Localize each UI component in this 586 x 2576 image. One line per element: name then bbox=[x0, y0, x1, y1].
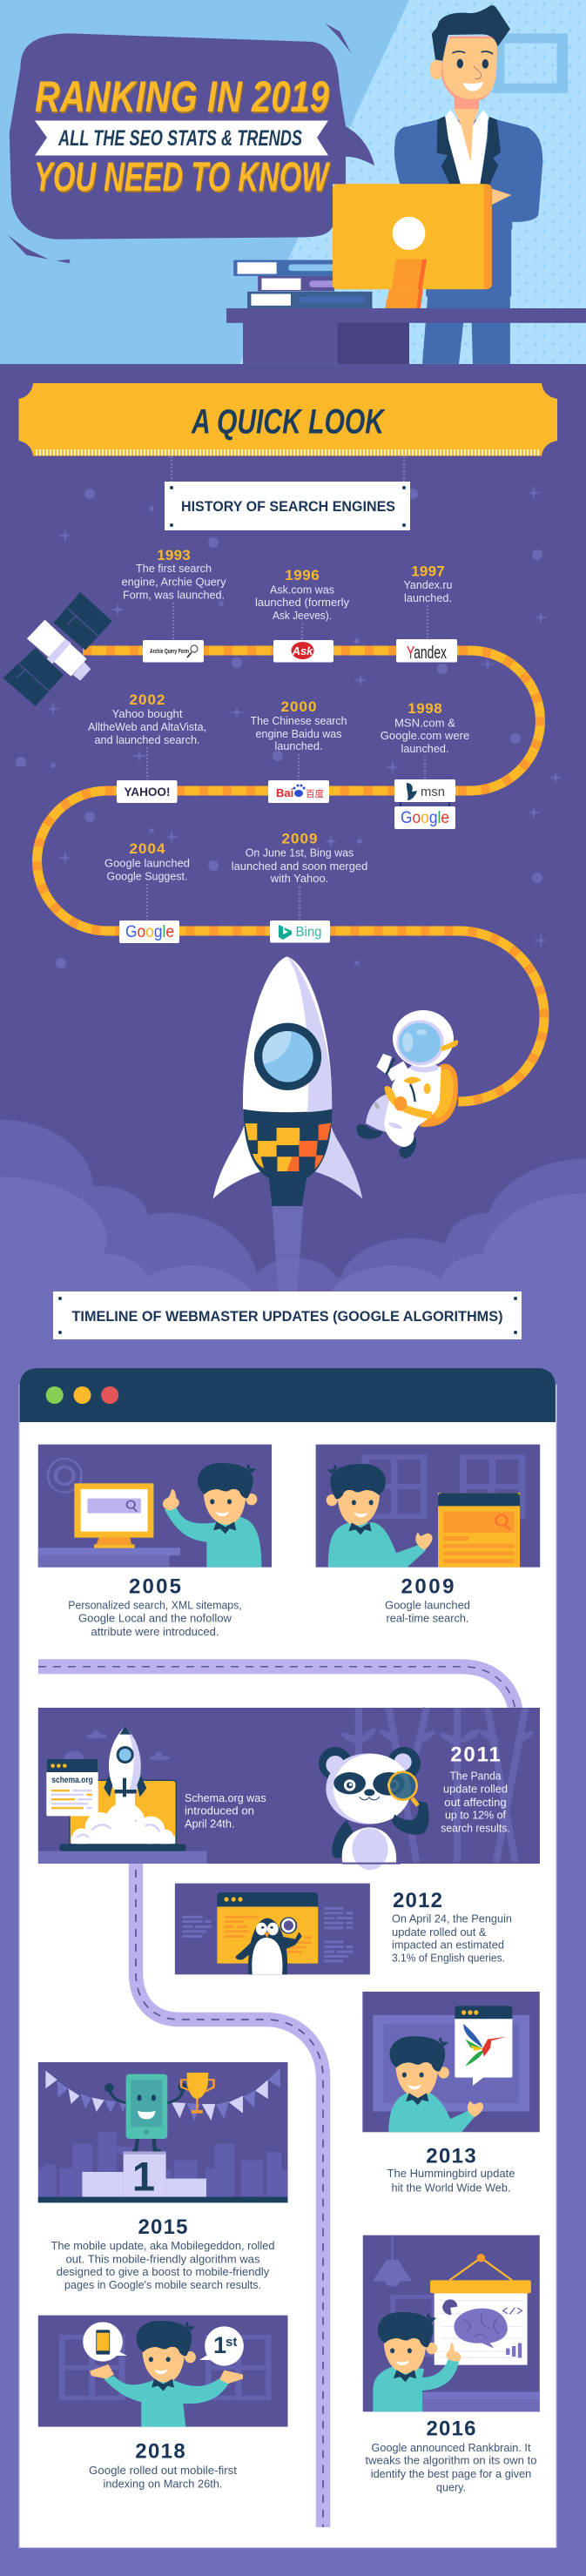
logo: Baidu: 百度 bbox=[306, 788, 324, 799]
trophy bbox=[187, 2073, 208, 2114]
panel: 2009 bbox=[316, 1445, 540, 1568]
icon: satellite bbox=[3, 592, 112, 706]
banner: A Quick Look bbox=[19, 383, 557, 456]
wall with dotted pattern bbox=[239, 0, 586, 364]
background: sky bbox=[0, 0, 586, 364]
text: 2018 bbox=[89, 2440, 237, 2491]
text: 1993: Form, was launched. bbox=[123, 589, 225, 601]
scene: bamboo and panda bbox=[319, 1708, 535, 1870]
text: 1997: 1997 bbox=[411, 563, 445, 580]
text: 1996: Ask Jeeves). bbox=[273, 609, 332, 622]
ribbon subtitle bbox=[35, 120, 328, 155]
text: 2018: 2018 bbox=[135, 2440, 185, 2463]
text: 2002: AlltheWeb and AltaVista, bbox=[88, 720, 206, 733]
text: 2002 bbox=[88, 691, 206, 746]
title: YOU NEED TO KNOW bbox=[34, 153, 331, 199]
title bbox=[34, 72, 331, 199]
sign: history of search engines bbox=[165, 456, 410, 530]
man lower body bbox=[422, 217, 511, 364]
text: 1998: Google.com were bbox=[381, 729, 469, 742]
logo: Baidu: Bai bbox=[276, 786, 293, 799]
logo: Archie Query Form bbox=[143, 640, 204, 662]
text: 2002: and launched search. bbox=[94, 733, 200, 746]
logo: Google bbox=[394, 802, 455, 829]
text: 2016: Google announced Rankbrain. It bbox=[371, 2441, 531, 2454]
text: 2011: up to 12% of bbox=[445, 1808, 506, 1822]
text: 1997: Yandex.ru bbox=[404, 578, 453, 591]
text: 1997 bbox=[404, 563, 453, 604]
text: 2015: pages in Google's mobile search results. bbox=[64, 2278, 261, 2291]
text: 2011: search results. bbox=[441, 1822, 510, 1834]
window buttons bbox=[46, 1386, 118, 1404]
text: 2012: On April 24, the Penguin bbox=[392, 1912, 512, 1925]
text: 2009: real-time search. bbox=[387, 1611, 468, 1625]
text: 1996: 1996 bbox=[285, 567, 320, 583]
picture frame bbox=[499, 38, 562, 88]
text: 1993 bbox=[122, 547, 226, 601]
label: 1st: st bbox=[226, 2335, 237, 2350]
sign: history of search engines: HISTORY OF SEARCH ENGINES bbox=[181, 498, 395, 515]
text: 2016: tweaks the algorithm on its own to bbox=[366, 2454, 536, 2466]
logo: Yandex: Yandex bbox=[407, 644, 447, 663]
logo: Yandex bbox=[396, 639, 457, 663]
panel: 2016 rankbrain bbox=[363, 2235, 540, 2411]
banner: A Quick Look: A QUICK LOOK bbox=[191, 402, 386, 441]
desk bbox=[226, 308, 586, 364]
man upper body and face bbox=[394, 5, 542, 229]
logo: Ask bbox=[273, 640, 333, 662]
text: 2018: indexing on March 26th. bbox=[103, 2477, 223, 2491]
title speech bubble bbox=[8, 24, 374, 263]
text: schema introduced: Schema.org was bbox=[185, 1791, 266, 1804]
text: 2005: Personalized search, XML sitemaps, bbox=[68, 1599, 242, 1611]
text: 2015: out. This mobile-friendly algorithm was bbox=[66, 2252, 260, 2266]
text: 2004: Google Suggest. bbox=[106, 869, 188, 883]
logo: Archie Query Form: Archie Query Form bbox=[150, 649, 189, 655]
text: 2009: Google launched bbox=[385, 1599, 470, 1611]
text: 1996: launched (formerly bbox=[255, 596, 350, 609]
text: 2015 bbox=[51, 2215, 275, 2291]
logo: Google: Google bbox=[401, 809, 449, 827]
astronaut bbox=[356, 1010, 458, 1158]
sign: timeline of webmaster updates bbox=[53, 1291, 522, 1339]
text: 2012 bbox=[392, 1889, 512, 1965]
clouds bbox=[0, 1120, 586, 1379]
panel: 2011 background bbox=[38, 1708, 540, 1864]
road middle bbox=[136, 1855, 323, 2527]
road top bbox=[38, 1667, 516, 1716]
stars and dots background bbox=[16, 486, 562, 968]
logo: MSN bbox=[394, 779, 455, 802]
text: 2002: 2002 bbox=[129, 691, 165, 708]
panel: 2012 penguin bbox=[175, 1884, 370, 1974]
text: 1997: launched. bbox=[404, 591, 452, 604]
text: 2004 bbox=[104, 840, 190, 883]
sign: timeline of webmaster updates: TIMELINE OF WEBMASTER UPDATES (GOOGLE ALGORITHMS) bbox=[71, 1308, 503, 1325]
logo: Google 2004 bbox=[119, 920, 179, 943]
dotted connectors bbox=[147, 603, 428, 920]
text: 2016 bbox=[366, 2418, 536, 2494]
phone bbox=[132, 2139, 161, 2150]
rocket bbox=[213, 956, 362, 1293]
text: 2012: 3.1% of English queries. bbox=[392, 1951, 505, 1965]
text: 1993: The first search bbox=[136, 562, 212, 575]
text: 2016: query. bbox=[436, 2480, 466, 2494]
ribbon subtitle: ALL THE SEO STATS & TRENDS bbox=[57, 126, 302, 151]
text: 2011 bbox=[441, 1743, 510, 1834]
logo: Bing bbox=[270, 920, 330, 942]
text: 2011: update rolled bbox=[443, 1782, 508, 1796]
scene: mobile phone on podium bbox=[38, 2068, 287, 2202]
text: 2009 history: with Yahoo. bbox=[270, 872, 328, 885]
text: 2013: The Hummingbird update bbox=[387, 2167, 515, 2180]
logo: Yahoo bbox=[117, 780, 178, 803]
text: 2004: Google launched bbox=[104, 857, 190, 869]
text: 1998: 1998 bbox=[408, 700, 442, 717]
background: lower section bbox=[0, 1306, 586, 2576]
panel: 2018 mobile first bbox=[38, 2316, 287, 2427]
text: 2011: The Panda bbox=[449, 1770, 502, 1782]
text: schema introduced bbox=[185, 1791, 266, 1831]
text: schema introduced: introduced on bbox=[185, 1804, 254, 1817]
text: schema introduced: April 24th. bbox=[185, 1817, 235, 1831]
text: 2015: designed to give a boost to mobile-friendly bbox=[57, 2265, 270, 2278]
logo: Bing: Bing bbox=[296, 925, 322, 940]
text: 2018: Google rolled out mobile-first bbox=[89, 2464, 237, 2477]
text: 2009 history: 2009 bbox=[282, 831, 317, 846]
podium bbox=[82, 2172, 124, 2197]
text: 2009: 2009 bbox=[401, 1575, 455, 1599]
text: 2000: 2000 bbox=[280, 698, 317, 715]
schema card bbox=[46, 1759, 98, 1816]
text: 2013: hit the World Wide Web. bbox=[392, 2181, 510, 2195]
text: 1996: Ask.com was bbox=[270, 583, 334, 596]
title: RANKING IN 2019 bbox=[35, 72, 329, 121]
browser window bbox=[19, 1368, 556, 2548]
background: purple space section bbox=[0, 364, 586, 1331]
text: 2009 history bbox=[232, 831, 367, 885]
text: 2000: launched. bbox=[275, 739, 322, 752]
text: 2013: 2013 bbox=[426, 2144, 476, 2168]
text: 2002: Yahoo bought bbox=[111, 707, 183, 720]
text: 2009 history: On June 1st, Bing was bbox=[246, 846, 354, 859]
text: 1998: MSN.com & bbox=[394, 716, 455, 730]
text: 1993: engine, Archie Query bbox=[122, 575, 226, 589]
text: 2016: identify the best page for a given bbox=[371, 2467, 531, 2480]
panel: 2005 bbox=[38, 1445, 272, 1568]
text: 2015: The mobile update, aka Mobilegeddon, rolled bbox=[51, 2239, 275, 2252]
text: 1996 bbox=[255, 567, 350, 622]
text: 2000: engine Baidu was bbox=[256, 727, 342, 740]
text: 2012: update rolled out & bbox=[392, 1925, 487, 1939]
text: 2011: out affecting bbox=[444, 1796, 507, 1809]
label: 1st: 1 bbox=[213, 2332, 226, 2358]
text: 2012: impacted an estimated bbox=[392, 1939, 504, 1951]
logo: Google 2004: Google bbox=[125, 923, 174, 941]
label: schema.org: schema.org bbox=[51, 1775, 93, 1785]
text: 2005: 2005 bbox=[129, 1575, 181, 1599]
label: 1st bbox=[213, 2332, 237, 2358]
computer monitor bbox=[333, 184, 492, 308]
text: 2015: 2015 bbox=[138, 2215, 188, 2239]
logo: Yahoo: YAHOO! bbox=[124, 785, 171, 799]
books bbox=[233, 260, 372, 308]
text: 2005 bbox=[68, 1575, 242, 1638]
text: 2005: Google Local and the nofollow bbox=[78, 1611, 232, 1625]
timeline path bbox=[37, 651, 544, 1102]
text: 2016: 2016 bbox=[427, 2418, 475, 2440]
text: 1993: 1993 bbox=[157, 547, 191, 563]
panel: 2013 hummingbird bbox=[362, 1992, 540, 2132]
podium number: 1 bbox=[132, 2153, 155, 2200]
text: 2013 bbox=[387, 2144, 515, 2195]
logo: MSN: msn bbox=[421, 785, 445, 799]
bunting bbox=[45, 2071, 268, 2121]
text: 1998: launched. bbox=[401, 742, 449, 755]
text: 1998 bbox=[381, 700, 469, 755]
text: 2005: attribute were introduced. bbox=[91, 1625, 219, 1638]
logo: Baidu bbox=[268, 780, 329, 803]
text: 2004: 2004 bbox=[129, 840, 165, 857]
text: 2000 bbox=[251, 698, 347, 752]
panel: 2015 background and city bbox=[38, 2062, 288, 2202]
text: 2011: 2011 bbox=[450, 1743, 501, 1766]
text: 2009 bbox=[385, 1575, 470, 1625]
logo: Ask: Ask bbox=[292, 644, 313, 657]
scene: schema.org laptop and rocket bbox=[38, 1727, 207, 1864]
text: 2012: 2012 bbox=[393, 1889, 442, 1912]
text: 2009 history: launched and soon merged bbox=[232, 860, 367, 873]
text: 2000: The Chinese search bbox=[251, 714, 347, 727]
